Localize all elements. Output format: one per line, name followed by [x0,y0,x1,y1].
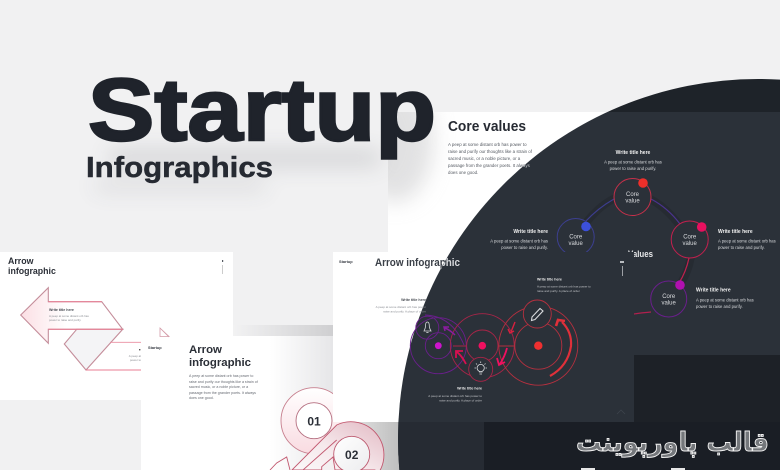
label: right node: power to raise and purify. [718,245,765,250]
caption: left [376,298,426,314]
label: left node: Write title here [513,229,548,235]
caption: left: A peep at some distant orb has power [376,305,426,309]
text block: description: raise and purify our thoughts like a strain of [189,380,258,384]
caption: top: raise and purify. A place of order [537,289,580,293]
icon: bulb [474,362,487,374]
label: right node [718,229,776,250]
label: bottom node [696,288,754,309]
node: core value 3: value [683,241,698,247]
text block: core values description: sacred music, or a noble picture, or a [448,156,521,161]
heading: core values: Core values [448,119,526,135]
node: core value 1: Core [626,192,640,198]
label: bottom node: A peep at some distant orb has [696,298,754,302]
caption: bottom: A peep at some distant orb has power to [428,394,482,398]
arrow caption: Write title here [49,308,74,312]
centre dots [435,342,542,350]
heading: arrow infographic: Arrow [189,344,222,356]
caption: top [537,278,591,293]
watermark fragments [581,468,685,470]
halo behind core value ring [575,194,691,299]
label: top node: Write title here [616,150,651,156]
arrow: crimson right [497,348,507,365]
startup label: Startup [339,259,353,264]
title: Startup: Startup [88,60,436,159]
node: core value 4: Core [662,294,676,300]
node: core value 3 [671,221,708,258]
label: right node: Write title here [718,229,753,235]
text block: core values description: passage from the grander poets. It always [448,163,531,168]
caption: top: A peep at some distant orb has power to [537,284,591,288]
node: core value 2: Core [569,234,583,240]
label: top node: power to raise and purify. [610,166,656,171]
text block: description: A peep at some distant orb has power to [189,374,253,378]
slide: arrow infographic, left [0,252,233,400]
arrow caption [49,308,89,322]
caption: left: raise and purify. A place of order [383,310,426,314]
subtitle: Infographics: Infographics [86,152,273,184]
gray band above lower slide [233,325,333,336]
label: left node [490,229,548,250]
heading: arrow infographic: infographic [8,266,56,276]
arrow: crimson left [456,351,466,364]
label: left node: power to raise and purify. [501,245,548,250]
heading light copy on dark: Arrow infographic [375,257,460,269]
icon: pencil [532,308,543,320]
caption: bottom: raise and purify. A place of order [439,398,482,402]
label: top node: A peep at some distant orb has [604,160,662,164]
slide: arrow infographic, front [333,252,634,422]
title shadow [95,150,380,190]
heading: arrow infographic: Arrow infographic [375,257,460,269]
arrow: small red [508,322,515,333]
light copy: core values description [523,164,530,168]
ring 01 [281,388,347,454]
text block: core values description: raise and purify our thoughts like a strain of [448,149,533,154]
caption: bottom [428,386,482,402]
arrow caption: A peep at some distant orb has [49,314,89,318]
ring 02 [270,422,384,470]
page marker [222,260,223,274]
heading fragment: core values: Values [628,249,653,260]
caption: bottom: Write title here [457,386,482,390]
text block: description: passage from the grander poets. It always [189,391,256,395]
slide: core values (white side) [388,112,607,252]
label: bottom node: Write title here [696,288,731,294]
heading: arrow infographic: Arrow [8,256,34,266]
arrow diagram [21,288,142,370]
text block: description: sacred music, or a noble picture, or a [189,385,248,389]
circular arrow chart [410,300,578,385]
ring 02: 02 [345,448,359,462]
caption: top: Write title here [537,278,562,282]
text block: core values description [448,142,533,175]
arrow: purple [444,327,455,335]
label: left node: A peep at some distant orb has [490,238,548,244]
label: top node [604,150,662,171]
text block: description: does one good. [189,396,214,400]
corner glyph [617,410,625,414]
second caption [129,349,141,362]
caption: left: Write title here [401,298,426,302]
node: core value 2 [557,218,594,256]
startup label: Startup [148,345,162,350]
slide: arrow infographic, centre [141,336,411,470]
node: core value 1: value [625,198,640,204]
text block: core values description: does one good. [448,170,478,175]
text block: description [189,374,258,400]
light copy: core values description: passage from the grander poets. It always [448,163,531,168]
dark disc [380,60,780,470]
red ring [499,300,578,385]
heading: arrow infographic: infographic [189,357,251,369]
crimson ring [450,314,514,381]
connector arcs [585,199,689,314]
purple ring [410,315,466,374]
text block: core values description: A peep at some distant orb has power to [448,142,527,147]
label: bottom node: power to raise and purify. [696,304,743,309]
node: core value 2: value [569,241,584,247]
second caption: A peep at [129,354,141,358]
node: core value 1 [614,178,651,216]
light copy: core values description: does one good. [448,170,478,175]
arrow: big red [550,320,571,376]
label: right node: A peep at some distant orb has [718,238,776,244]
node: core value 4 [651,280,687,317]
second caption: power to [130,358,141,362]
icon: bell [424,322,431,332]
page marker [620,261,624,276]
node: core value 3: Core [683,234,697,240]
corner arrow fragment [160,328,169,337]
persian watermark: قالب پاورپوینت [576,428,769,458]
node: core value 4: value [662,300,677,306]
ring 01: 01 [307,414,321,428]
arrow caption: power to raise and purify. [49,318,81,322]
